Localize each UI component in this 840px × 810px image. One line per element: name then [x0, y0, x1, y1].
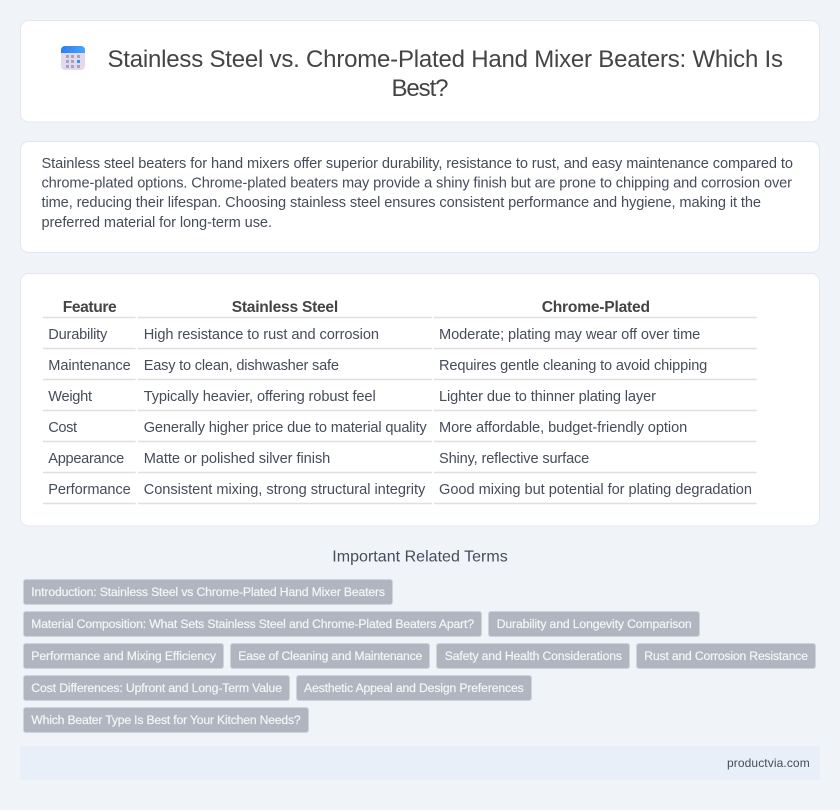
table row: weight — [48, 389, 656, 405]
table row: appearance: Matte or polished silver finish — [144, 451, 330, 467]
tag: ease of cleaning — [230, 644, 430, 668]
heading: important related terms: Important Related Terms — [332, 549, 508, 566]
table row: maintenance: Easy to clean, dishwasher safe — [144, 358, 339, 374]
tag: rust resistance — [636, 644, 816, 668]
table row: cost: Generally higher price due to material quality — [144, 420, 427, 436]
table header row: Chrome-Plated — [542, 299, 650, 316]
tag: durability — [488, 612, 700, 636]
tag: safety — [436, 644, 630, 668]
tag: introduction — [24, 580, 392, 604]
table row: durability: Moderate; plating may wear off over time — [439, 327, 700, 343]
table row: performance — [48, 482, 752, 498]
tag: material composition — [24, 612, 482, 636]
table row: durability: High resistance to rust and corrosion — [144, 327, 379, 343]
table header row: Feature — [63, 299, 117, 316]
footer: productvia.com — [727, 756, 810, 770]
text block: introduction paragraph: Stainless steel beaters for hand mixers offer superior durability, resistance to rust, and easy maintenance compared to — [42, 156, 793, 172]
table header row: Stainless Steel — [232, 299, 338, 316]
icon: calendar grid — [61, 46, 85, 70]
table row: durability: Durability — [48, 327, 108, 343]
table row: cost: Cost — [48, 420, 77, 436]
tag: performance: Performance and Mixing Efficiency — [31, 649, 217, 663]
tag: safety: Safety and Health Considerations — [445, 649, 622, 663]
tag: performance — [24, 644, 224, 668]
panel: introduction — [20, 142, 820, 252]
tag: rust resistance: Rust and Corrosion Resistance — [644, 649, 808, 663]
table row: appearance: Shiny, reflective surface — [439, 451, 589, 467]
tag: ease of cleaning: Ease of Cleaning and Maintenance — [238, 649, 423, 663]
table row: maintenance — [48, 358, 707, 374]
table header row — [63, 299, 650, 316]
table row: weight: Lighter due to thinner plating layer — [439, 389, 656, 405]
tag: cost differences — [24, 676, 290, 700]
title: Best? — [392, 75, 448, 102]
tag: which beater: Which Beater Type Is Best for Your Kitchen Needs? — [31, 713, 301, 727]
table row: cost: More affordable, budget-friendly option — [439, 420, 687, 436]
tag: introduction: Introduction: Stainless Steel vs Chrome-Plated Hand Mixer Beaters — [31, 585, 385, 599]
table row: maintenance: Maintenance — [48, 358, 131, 374]
text block: introduction paragraph — [42, 156, 793, 231]
text block: introduction paragraph: time, reducing their lifespan. Choosing stainless steel ensures consistent performance and hygiene, making it the — [42, 195, 761, 211]
table row: performance: Performance — [48, 482, 131, 498]
tag: durability: Durability and Longevity Comparison — [497, 617, 692, 631]
panel: related term tags — [24, 580, 816, 732]
table row: weight: Weight — [48, 389, 92, 405]
title — [108, 46, 783, 102]
table row: weight: Typically heavier, offering robust feel — [144, 389, 376, 405]
table row: appearance: Appearance — [48, 451, 124, 467]
text block: introduction paragraph: chrome-plated options. Chrome-plated beaters may provide a shiny finish but are prone to chipping and corrosion over — [42, 176, 792, 192]
table row: appearance — [48, 451, 589, 467]
tag: cost differences: Cost Differences: Upfront and Long-Term Value — [31, 681, 282, 695]
tag: aesthetic appeal: Aesthetic Appeal and Design Preferences — [304, 681, 524, 695]
table row: maintenance: Requires gentle cleaning to avoid chipping — [439, 358, 707, 374]
footer — [20, 746, 820, 780]
tag: material composition: Material Composition: What Sets Stainless Steel and Chrome-Plated Beaters Apart? — [31, 617, 474, 631]
table row: cost — [48, 420, 687, 436]
panel: comparison table — [20, 274, 820, 526]
panel: header — [20, 20, 820, 122]
table row: durability — [48, 327, 700, 343]
title: Stainless Steel vs. Chrome-Plated Hand Mixer Beaters: Which Is — [108, 46, 783, 73]
text block: introduction paragraph: preferred material for long-term use. — [42, 215, 272, 231]
table row: performance: Good mixing but potential for plating degradation — [439, 482, 752, 498]
table row: performance: Consistent mixing, strong structural integrity — [144, 482, 426, 498]
tag: which beater — [24, 708, 308, 732]
tag: aesthetic appeal — [296, 676, 532, 700]
